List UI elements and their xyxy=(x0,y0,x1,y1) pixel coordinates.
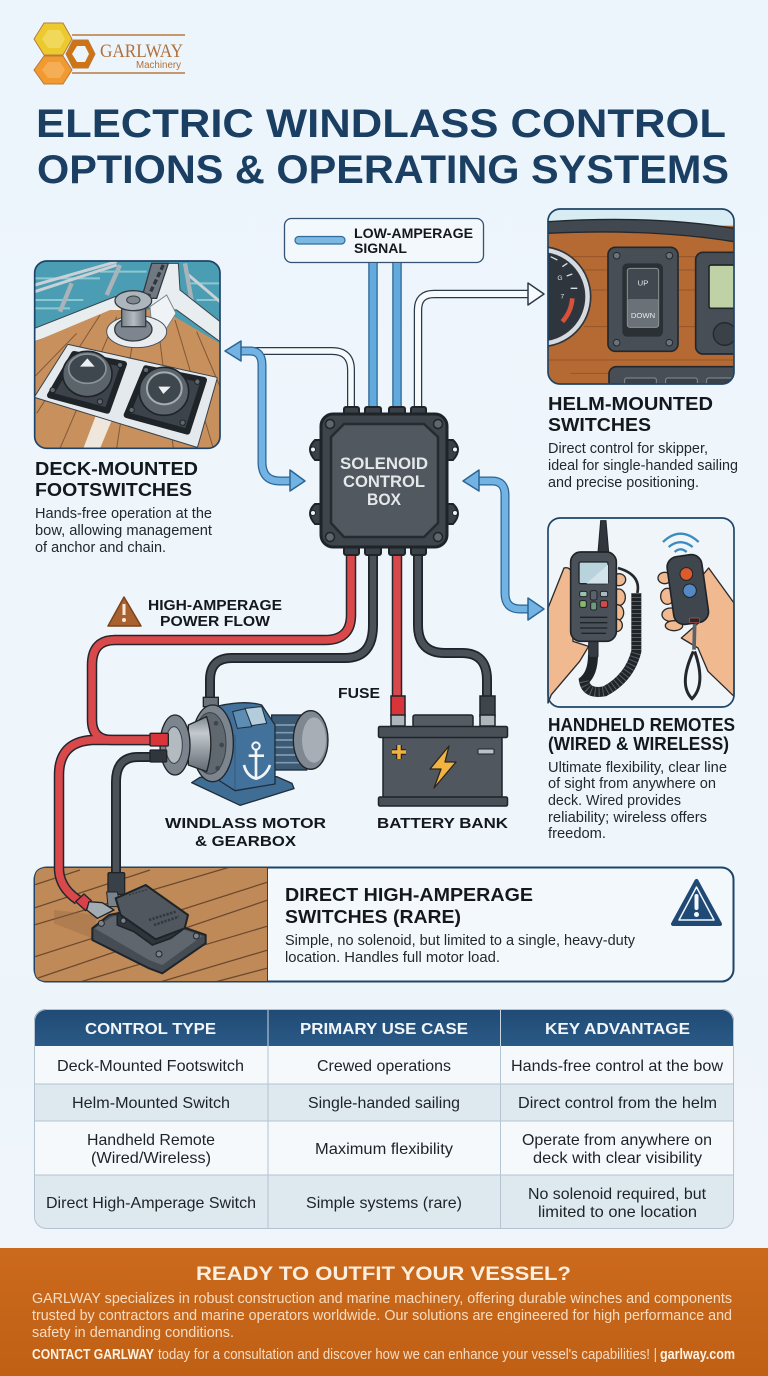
legend: low-amperage signal xyxy=(284,218,484,262)
alternating row shading xyxy=(34,1084,734,1229)
table header row xyxy=(34,1009,734,1046)
footer body text: safety in demanding conditions. xyxy=(32,1325,234,1341)
table row: handheld remote: Maximum flexibility xyxy=(315,1141,453,1158)
label: windlass motor and gearbox: & GEARBOX xyxy=(195,834,296,850)
description text: Simple, no solenoid, but limited to a single, heavy-duty xyxy=(285,932,635,949)
footer contact line: today for a consultation and discover how we can enhance your vessel's capabilities! | xyxy=(158,1347,657,1363)
heading and text: handheld remotes: of sight from anywhere on xyxy=(548,775,716,792)
icon: windlass motor and gearbox xyxy=(150,697,328,805)
arrow: solenoid to handheld remotes xyxy=(463,470,544,620)
panel: helm switch illustration: 7 xyxy=(560,293,564,300)
table row: direct high-amperage switch: Direct High-Amperage Switch xyxy=(46,1195,256,1212)
label: high-amperage power flow with warning icon: POWER FLOW xyxy=(160,614,270,630)
panel: helm switch illustration: G xyxy=(557,275,563,282)
table header text xyxy=(85,1021,690,1038)
footer body text: GARLWAY specializes in robust construction and marine machinery, offering durable winches and components xyxy=(32,1291,732,1307)
comparison table xyxy=(34,1009,734,1229)
logo: Garlway Machinery: GARLWAY xyxy=(100,41,183,62)
label: fuse: FUSE xyxy=(338,686,380,702)
heading and text: handheld remotes: HANDHELD REMOTES xyxy=(548,714,735,735)
heading and text: helm-mounted switches xyxy=(548,393,738,491)
icon: warning triangle xyxy=(673,881,720,924)
table row: deck-mounted footswitch: Crewed operations xyxy=(317,1058,451,1075)
label: high-amperage power flow with warning icon xyxy=(108,597,282,630)
heading: direct high-amperage switches: DIRECT HIGH-AMPERAGE xyxy=(285,885,533,905)
table row: deck-mounted footswitch xyxy=(57,1058,723,1075)
heading and text: helm-mounted switches: Direct control for skipper, xyxy=(548,440,708,457)
heading and text: handheld remotes: Ultimate flexibility, clear line xyxy=(548,759,727,776)
label: high-amperage power flow with warning icon: HIGH-AMPERAGE xyxy=(148,598,282,614)
table header text: PRIMARY USE CASE xyxy=(300,1021,468,1038)
description text xyxy=(285,932,635,966)
title: OPTIONS & OPERATING SYSTEMS xyxy=(37,148,729,192)
description text: location. Handles full motor load. xyxy=(285,949,500,966)
table row: direct high-amperage switch: Simple systems (rare) xyxy=(306,1195,462,1212)
panel: helm switch illustration: UP xyxy=(638,278,648,287)
logo: Garlway Machinery: Machinery xyxy=(136,60,181,71)
footer contact line: CONTACT GARLWAY xyxy=(32,1347,154,1363)
heading: direct high-amperage switches: SWITCHES (RARE) xyxy=(285,907,461,927)
table row: handheld remote: Operate from anywhere on xyxy=(522,1132,712,1149)
arrow: solenoid to helm switches xyxy=(418,283,544,408)
table row: deck-mounted footswitch: Hands-free control at the bow xyxy=(511,1058,723,1075)
footer body text xyxy=(32,1291,732,1341)
table row: direct high-amperage switch: limited to one location xyxy=(538,1204,697,1221)
panel: helm switch illustration: DOWN xyxy=(631,311,655,320)
heading and text: deck-mounted footswitches: of anchor and chain. xyxy=(35,539,166,556)
heading and text: helm-mounted switches: SWITCHES xyxy=(548,414,651,435)
heading and text: helm-mounted switches: and precise positioning. xyxy=(548,474,699,491)
table row: helm-mounted switch: Helm-Mounted Switch xyxy=(72,1095,230,1112)
panel: deck-mounted footswitch illustration xyxy=(35,261,220,448)
solenoid control box xyxy=(310,407,458,555)
legend: low-amperage signal: LOW-AMPERAGE xyxy=(354,225,473,241)
heading and text: deck-mounted footswitches: bow, allowing management xyxy=(35,522,213,539)
table row: handheld remote: (Wired/Wireless) xyxy=(91,1150,211,1167)
heading and text: deck-mounted footswitches: DECK-MOUNTED xyxy=(35,458,198,479)
heading and text: deck-mounted footswitches: FOOTSWITCHES xyxy=(35,479,192,500)
high-amperage wires: black returns xyxy=(116,555,487,880)
heading and text: handheld remotes: reliability; wireless offers xyxy=(548,809,707,826)
high-amperage wires: red positive feeds xyxy=(59,555,397,900)
table row: helm-mounted switch xyxy=(72,1095,717,1112)
label: battery bank: BATTERY BANK xyxy=(377,816,509,832)
logo: Garlway Machinery xyxy=(34,23,185,84)
heading and text: helm-mounted switches: HELM-MOUNTED xyxy=(548,393,713,414)
heading and text: deck-mounted footswitches xyxy=(35,458,213,556)
heading and text: deck-mounted footswitches: Hands-free operation at the xyxy=(35,505,212,522)
title xyxy=(36,102,729,192)
arrow: solenoid to deck footswitches (white signal wire and blue return) xyxy=(225,341,351,491)
footer body text: trusted by contractors and marine operators worldwide. Our solutions are engineered for high performance and xyxy=(32,1308,732,1324)
table row: handheld remote: deck with clear visibility xyxy=(533,1150,702,1167)
heading and text: handheld remotes: (WIRED & WIRELESS) xyxy=(548,733,729,754)
legend: low-amperage signal: SIGNAL xyxy=(354,240,407,256)
solenoid control box: BOX xyxy=(367,491,401,509)
table row: deck-mounted footswitch: Deck-Mounted Footswitch xyxy=(57,1058,244,1075)
table row: helm-mounted switch: Direct control from the helm xyxy=(518,1095,717,1112)
table row: helm-mounted switch: Single-handed sailing xyxy=(308,1095,460,1112)
heading and text: handheld remotes: deck. Wired provides xyxy=(548,792,681,809)
footer contact line: garlway.com xyxy=(660,1347,735,1363)
low-amperage signal wires xyxy=(373,263,397,408)
label: windlass motor and gearbox xyxy=(165,816,327,850)
solenoid control box: SOLENOID xyxy=(340,455,428,473)
heading and text: handheld remotes xyxy=(548,714,735,842)
table header text: KEY ADVANTAGE xyxy=(545,1021,690,1038)
table row: direct high-amperage switch: No solenoid required, but xyxy=(528,1186,707,1203)
panel: helm switch illustration xyxy=(547,208,735,385)
icon: direct high-amperage foot switch xyxy=(54,873,206,973)
panel: direct high-amperage switches xyxy=(34,867,734,982)
table row: handheld remote: Handheld Remote xyxy=(87,1132,215,1149)
solenoid control box: CONTROL xyxy=(343,473,425,491)
heading: direct high-amperage switches xyxy=(285,885,533,927)
table header text: CONTROL TYPE xyxy=(85,1021,216,1038)
table row: handheld remote xyxy=(87,1132,712,1167)
table row: direct high-amperage switch xyxy=(46,1186,707,1221)
panel: handheld remotes illustration xyxy=(548,518,734,708)
heading and text: handheld remotes: freedom. xyxy=(548,825,606,842)
icon: battery bank xyxy=(378,696,508,806)
heading and text: helm-mounted switches: ideal for single-handed sailing xyxy=(548,457,738,474)
title: ELECTRIC WINDLASS CONTROL xyxy=(36,102,726,146)
footer heading: READY TO OUTFIT YOUR VESSEL? xyxy=(196,1263,571,1285)
footer call to action xyxy=(0,1248,768,1376)
wood deck background xyxy=(34,867,268,982)
label: windlass motor and gearbox: WINDLASS MOTOR xyxy=(165,816,327,832)
